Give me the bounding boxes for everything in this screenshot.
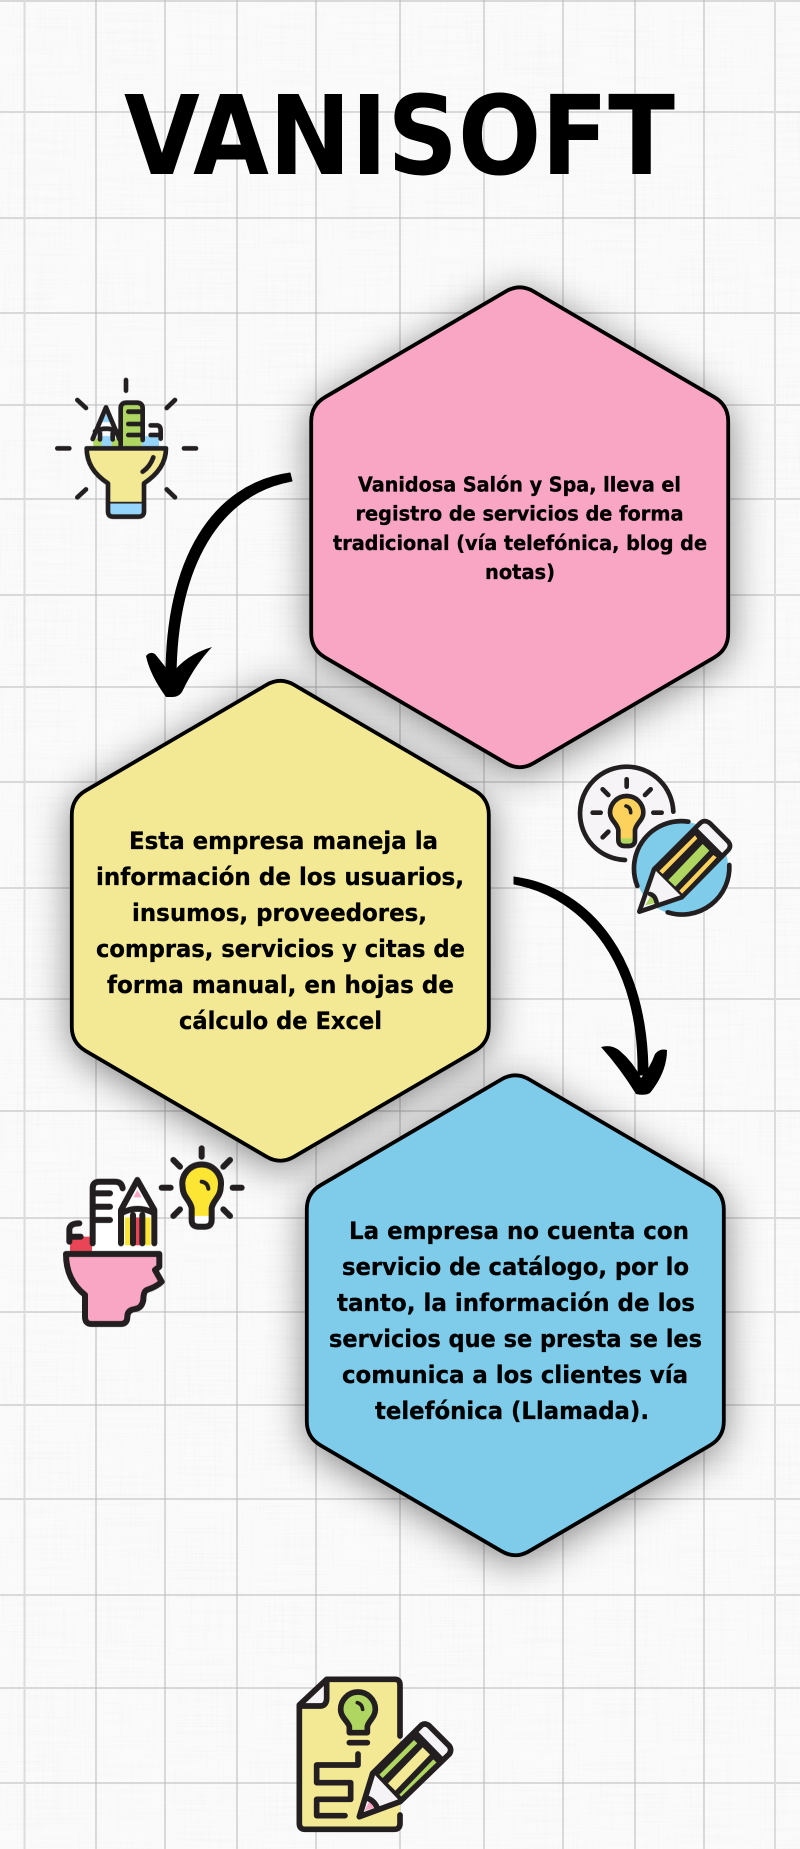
text block: pink hexagon: notas) <box>485 560 555 584</box>
text block: blue hexagon: servicio de catálogo, por lo <box>342 1252 689 1281</box>
panel: blue hexagon <box>307 1075 724 1555</box>
text block: yellow hexagon: Esta empresa maneja la <box>129 826 438 855</box>
hexagon drop shadows <box>72 293 728 1562</box>
icon: lightbulb circle and pencil <box>580 766 730 915</box>
icon: head with ruler, pencil and lightbulb <box>66 1148 242 1324</box>
text block: yellow hexagon <box>96 826 465 1035</box>
panel: yellow hexagon <box>72 681 489 1161</box>
text block: yellow hexagon: cálculo de Excel <box>179 1006 382 1035</box>
text block: yellow hexagon: insumos, proveedores, <box>132 898 427 927</box>
text block: blue hexagon: comunica a los clientes vía <box>342 1360 688 1389</box>
text block: yellow hexagon: información de los usuarios, <box>96 862 464 891</box>
icon: document with lightbulb and pencil <box>299 1679 451 1829</box>
text block: blue hexagon: La empresa no cuenta con <box>349 1216 689 1245</box>
panel: pink hexagon <box>311 287 728 767</box>
text block: yellow hexagon: compras, servicios y citas de <box>96 934 465 963</box>
arrow: yellow to blue <box>514 877 667 1095</box>
text block: pink hexagon: Vanidosa Salón y Spa, lleva el <box>358 473 681 497</box>
icon: idea bulb with ruler and pencil <box>57 380 196 517</box>
text block: blue hexagon: telefónica (Llamada). <box>375 1396 649 1425</box>
text block: pink hexagon: tradicional (vía telefónica, blog de <box>333 531 707 555</box>
text block: yellow hexagon: forma manual, en hojas de <box>107 970 454 999</box>
text block: pink hexagon: registro de servicios de forma <box>356 502 684 526</box>
title: VANISOFT <box>124 72 675 200</box>
text block: blue hexagon <box>329 1216 702 1425</box>
text block: blue hexagon: servicios que se presta se les <box>329 1324 702 1353</box>
arrow: pink to yellow <box>146 473 292 697</box>
text block: pink hexagon <box>333 473 707 584</box>
text block: blue hexagon: tanto, la información de los <box>337 1288 695 1317</box>
